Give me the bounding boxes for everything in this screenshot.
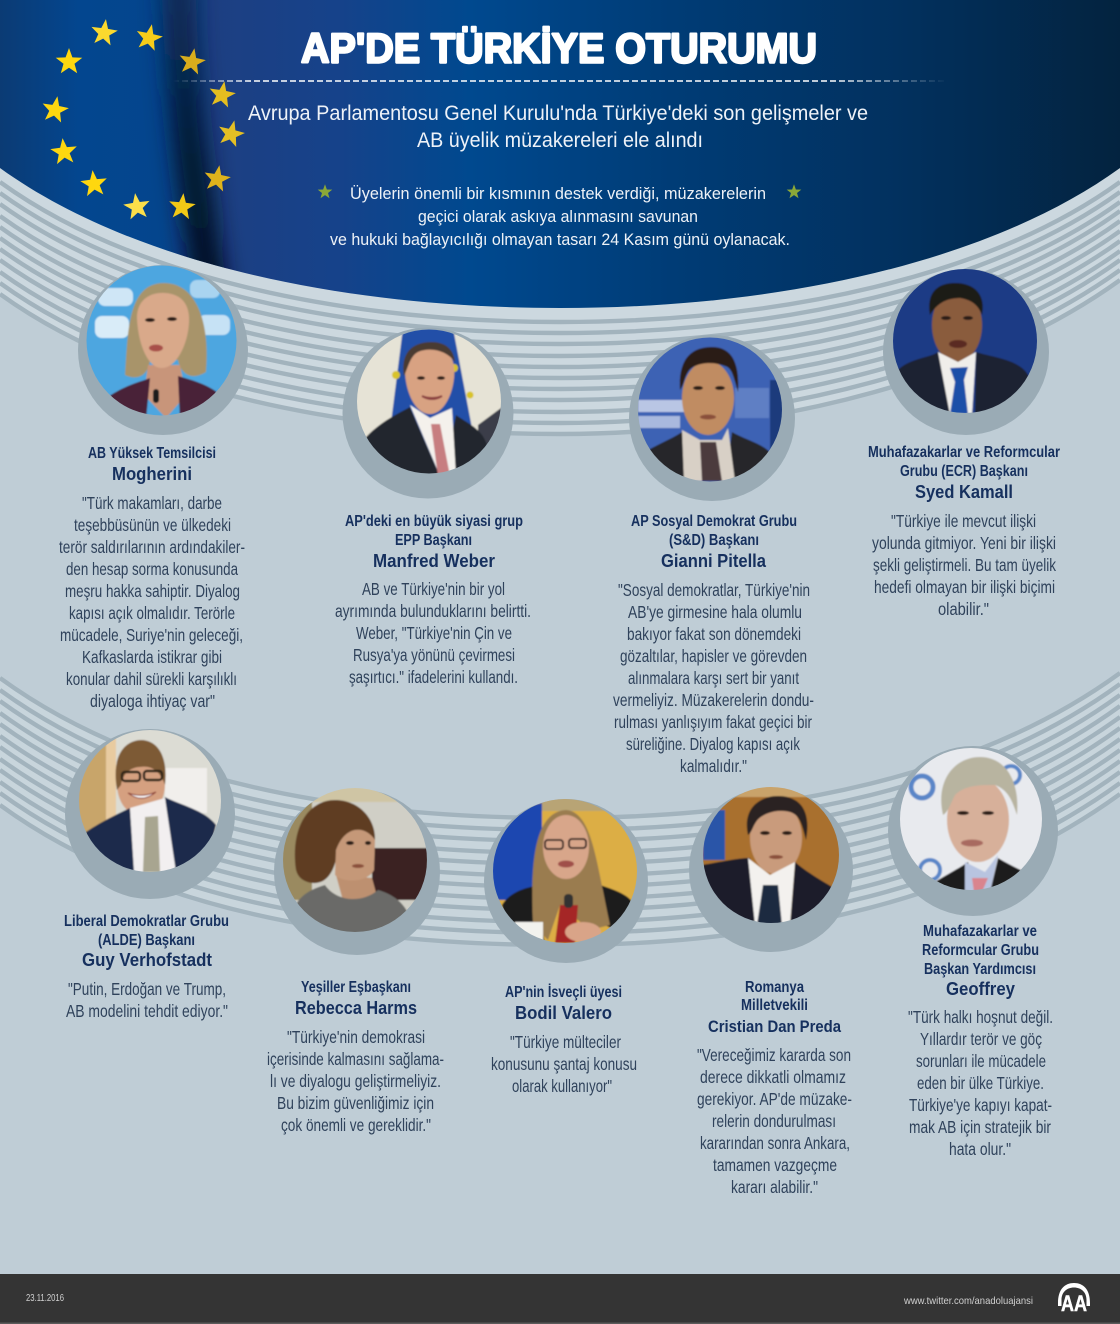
quote: hedefi olmayan bir ilişki biçimi	[874, 577, 1055, 597]
quote: derece dikkatli olmamız	[700, 1067, 846, 1087]
quote: AB'ye girmesine hala olumlu	[628, 602, 802, 622]
quote: olabilir."	[938, 599, 989, 619]
quote: AB ve Türkiye'nin bir yol	[362, 579, 505, 599]
name: Bodil Valero	[515, 1003, 612, 1023]
intro text	[330, 185, 790, 249]
quote	[697, 1045, 852, 1197]
quote: konular dahil sürekli karşılıklı	[66, 669, 237, 689]
date: 23.11.2016	[26, 1293, 64, 1304]
quote	[59, 493, 245, 711]
quote: "Türkiye ile mevcut ilişki	[891, 511, 1036, 531]
quote: lı ve diyalogu geliştirmeliyiz.	[270, 1071, 441, 1091]
twitter url: www.twitter.com/anadoluajansi	[903, 1295, 1033, 1307]
quote: kararından sonra Ankara,	[700, 1133, 850, 1153]
quote: şaşırtıcı." ifadelerini kullandı.	[349, 667, 518, 687]
quote: ayrımında bulunduklarını belirtti.	[335, 601, 531, 621]
quote: Kafkaslarda istikrar gibi	[82, 647, 222, 667]
name: Cristian Dan Preda	[708, 1017, 841, 1036]
subtitle: Avrupa Parlamentosu Genel Kurulu'nda Türkiye'deki son gelişmeler ve	[248, 102, 868, 125]
quote: Türkiye'ye kapıyı kapat-	[909, 1095, 1052, 1115]
quote: konusunu şantaj konusu	[491, 1054, 637, 1074]
icon: green star left	[318, 184, 332, 198]
quote: relerin dondurulması	[712, 1111, 836, 1131]
role heading: Başkan Yardımcısı	[924, 961, 1036, 978]
role heading	[922, 923, 1039, 978]
photo: Geoffrey	[898, 746, 1044, 892]
panel: Geoffrey	[888, 746, 1058, 1159]
quote: mak AB için stratejik bir	[909, 1117, 1051, 1137]
quote: eden bir ülke Türkiye.	[917, 1073, 1044, 1093]
quote	[335, 579, 531, 687]
quote: AB modelini tehdit ediyor."	[66, 1001, 228, 1021]
role heading: Yeşiller Eşbaşkanı	[301, 979, 411, 996]
quote: mücadele, Suriye'nin geleceği,	[60, 625, 243, 645]
quote: diyaloga ihtiyaç var"	[90, 691, 215, 711]
name: Gianni Pitella	[661, 551, 767, 571]
name: Syed Kamall	[915, 482, 1013, 502]
icon: AA logo	[1058, 1283, 1090, 1316]
icon: green star right	[787, 184, 801, 198]
role heading: EPP Başkanı	[395, 532, 472, 549]
quote: gerekiyor. AP'de müzake-	[697, 1089, 852, 1109]
quote: kapısı açık olmalıdır. Terörle	[69, 603, 235, 623]
quote	[66, 979, 228, 1021]
quote: Yıllardır terör ve göç	[920, 1029, 1042, 1049]
intro text: ve hukuki bağlayıcılığı olmayan tasarı 24 Kasım günü oylanacak.	[330, 231, 790, 249]
quote: gözaltılar, hapisler ve görevden	[620, 646, 807, 666]
quote	[491, 1032, 637, 1096]
quote: vermeliyiz. Müzakerelerin dondu-	[613, 690, 814, 710]
panel: Gianni Pitella	[613, 335, 814, 776]
quote: olarak kullanıyor"	[512, 1076, 612, 1096]
name: Manfred Weber	[373, 551, 495, 571]
quote: hata olur."	[949, 1139, 1011, 1159]
quote	[908, 1007, 1053, 1159]
name: Guy Verhofstadt	[82, 950, 212, 970]
photo: Kamall	[890, 266, 1040, 416]
panel: footer	[0, 1274, 1120, 1324]
role heading: Reformcular Grubu	[922, 942, 1039, 959]
photo: Verhofstadt	[78, 729, 224, 874]
name: Geoffrey	[946, 979, 1015, 999]
panel: Bodil Valero	[484, 797, 648, 1096]
role heading: Milletvekili	[741, 997, 808, 1014]
quote: Rusya'ya yönünü çevirmesi	[353, 645, 515, 665]
photo: Mogherini	[85, 264, 240, 420]
role heading: AP Sosyal Demokrat Grubu	[631, 513, 797, 530]
role heading: AP'deki en büyük siyasi grup	[345, 513, 523, 530]
quote	[613, 580, 814, 776]
title: AP'DE TÜRKİYE OTURUMU	[301, 24, 817, 72]
role heading	[631, 513, 797, 549]
quote: kalmalıdır."	[680, 756, 747, 776]
quote: "Türk halkı hoşnut değil.	[908, 1007, 1053, 1027]
quote: "Sosyal demokratlar, Türkiye'nin	[618, 580, 810, 600]
quote: kararı alabilir."	[731, 1177, 818, 1197]
role heading: Liberal Demokratlar Grubu	[64, 913, 229, 930]
role heading	[64, 913, 229, 949]
role heading: Romanya	[745, 979, 804, 996]
quote: den hesap sorma konusunda	[66, 559, 238, 579]
panel: Manfred Weber	[335, 328, 531, 687]
panel: Guy Verhofstadt	[64, 729, 235, 1021]
photo: Preda	[700, 785, 842, 927]
quote: teşebbüsünün ve ülkedeki	[74, 515, 231, 535]
intro text: geçici olarak askıya alınmasını savunan	[418, 208, 698, 226]
quote: terör saldırılarının ardındakiler-	[59, 537, 245, 557]
role heading: Muhafazakarlar ve Reformcular	[868, 444, 1060, 461]
quote: meşru hakka sahiptir. Diyalog	[65, 581, 240, 601]
quote: tamamen vazgeçme	[713, 1155, 837, 1175]
photo: Weber	[355, 328, 505, 480]
photo: Harms	[282, 786, 430, 934]
quote: "Putin, Erdoğan ve Trump,	[68, 979, 226, 999]
name: Mogherini	[112, 464, 192, 484]
subtitle	[248, 102, 868, 152]
intro text: Üyelerin önemli bir kısmının destek verdiği, müzakerelerin	[350, 185, 766, 203]
quote: çok önemli ve gereklidir."	[281, 1115, 431, 1135]
role heading: AP'nin İsveçli üyesi	[505, 984, 622, 1001]
quote: Weber, "Türkiye'nin Çin ve	[356, 623, 512, 643]
role heading: (S&D) Başkanı	[669, 532, 759, 549]
role heading: (ALDE) Başkanı	[98, 932, 195, 949]
quote: bakıyor fakat son dönemdeki	[627, 624, 801, 644]
role heading: Muhafazakarlar ve	[923, 923, 1037, 940]
panel: Cristian Dan Preda	[689, 785, 853, 1197]
icon: EU star ring	[40, 17, 247, 220]
icon: AA logo: AA	[1061, 1291, 1087, 1316]
quote: "Türk makamları, darbe	[82, 493, 222, 513]
subtitle: AB üyelik müzakereleri ele alındı	[417, 129, 703, 152]
quote: şekli geliştirmeli. Bu tam üyelik	[873, 555, 1056, 575]
quote: içerisinde kalmasını sağlama-	[267, 1049, 444, 1069]
panel: Mogherini	[59, 264, 248, 711]
quote: Bu bizim güvenliğimiz için	[277, 1093, 434, 1113]
panel: blue header	[0, 0, 1120, 340]
quote: "Türkiye mülteciler	[510, 1032, 621, 1052]
role heading	[741, 979, 808, 1014]
quote	[267, 1027, 444, 1135]
role heading	[345, 513, 523, 549]
quote: yolunda gitmiyor. Yeni bir ilişki	[872, 533, 1056, 553]
quote: rulması yanlışıyım fakat geçici bir	[614, 712, 812, 732]
quote: "Türkiye'nin demokrasi	[287, 1027, 425, 1047]
panel: Syed Kamall	[868, 266, 1060, 619]
quote: süreliğine. Diyalog kapısı açık	[626, 734, 800, 754]
photo: Pitella	[636, 336, 784, 484]
role heading: AB Yüksek Temsilcisi	[88, 445, 216, 462]
quote: sorunları ile mücadele	[916, 1051, 1046, 1071]
role heading: Grubu (ECR) Başkanı	[900, 463, 1028, 480]
panel: Rebecca Harms	[267, 786, 444, 1135]
quote: "Vereceğimiz kararda son	[697, 1045, 851, 1065]
photo: Valero	[490, 797, 640, 947]
role heading	[868, 444, 1060, 480]
quote	[872, 511, 1056, 619]
name: Rebecca Harms	[295, 998, 417, 1018]
quote: alınmalara karşı sert bir yanıt	[628, 668, 799, 688]
